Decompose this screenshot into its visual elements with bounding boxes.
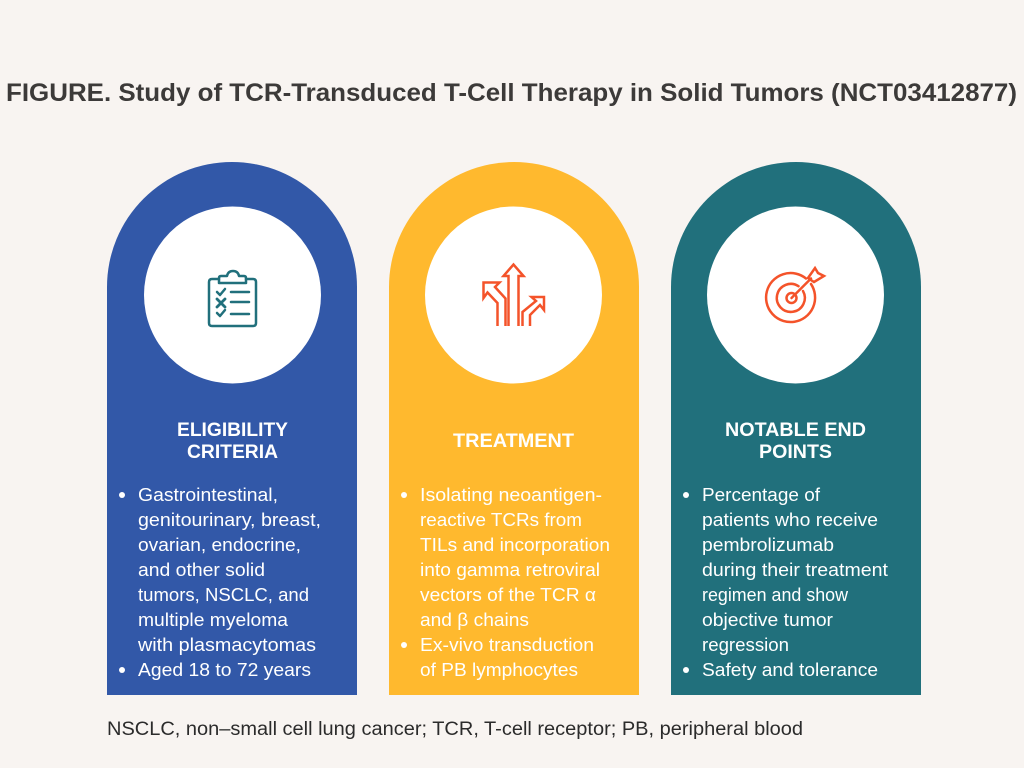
heading: notable end points: NOTABLE END — [725, 420, 866, 441]
end points list — [683, 485, 888, 680]
treatment list: TILs and incorporation — [420, 535, 610, 555]
icon: target with arrow — [766, 268, 824, 322]
icon circle: treatment — [425, 206, 602, 384]
treatment list: reactive TCRs from — [420, 510, 582, 530]
heading: treatment: TREATMENT — [453, 431, 574, 452]
eligibility criteria list: ovarian, endocrine, — [138, 535, 301, 555]
panel: notable end points — [671, 162, 921, 695]
treatment list: and β chains — [420, 610, 529, 630]
panel: treatment — [389, 162, 639, 695]
eligibility criteria list: with plasmacytomas — [137, 635, 316, 655]
icon: clipboard checklist — [209, 271, 256, 326]
icon circle: end points — [707, 206, 884, 384]
heading: notable end points: POINTS — [759, 442, 832, 463]
eligibility criteria list: multiple myeloma — [138, 610, 289, 630]
title: FIGURE. Study of TCR-Transduced T-Cell Therapy in Solid Tumors (NCT03412877) — [6, 79, 1017, 107]
end points list: Percentage of — [702, 485, 821, 505]
treatment list: into gamma retroviral — [420, 560, 600, 580]
arch background: end points — [671, 162, 921, 695]
end points list: objective tumor — [702, 610, 833, 630]
end points list: pembrolizumab — [702, 535, 834, 555]
treatment list: Ex-vivo transduction — [420, 635, 594, 655]
treatment list: of PB lymphocytes — [420, 660, 578, 680]
end points list: during their treatment — [702, 560, 888, 580]
end points list: patients who receive — [702, 510, 878, 530]
end points list: regimen and show — [702, 585, 849, 605]
eligibility criteria list: Gastrointestinal, — [138, 485, 278, 505]
end points list: regression — [702, 635, 789, 655]
panel: eligibility criteria — [107, 162, 357, 695]
eligibility criteria list: Aged 18 to 72 years — [138, 660, 311, 680]
icon: diverging arrows — [484, 264, 544, 326]
treatment list: Isolating neoantigen- — [420, 485, 602, 505]
eligibility criteria list: genitourinary, breast, — [138, 510, 321, 530]
treatment list — [401, 485, 610, 680]
heading: eligibility criteria: ELIGIBILITY — [177, 420, 288, 441]
arch background: treatment — [389, 162, 639, 695]
end points list: Safety and tolerance — [702, 660, 878, 680]
treatment list: vectors of the TCR α — [420, 585, 596, 605]
heading: eligibility criteria — [177, 420, 288, 463]
heading: notable end points — [725, 420, 866, 463]
eligibility criteria list — [119, 485, 321, 680]
eligibility criteria list: tumors, NSCLC, and — [138, 585, 309, 605]
heading: eligibility criteria: CRITERIA — [187, 442, 278, 463]
arch background: eligibility — [107, 162, 357, 695]
footnote: NSCLC, non–small cell lung cancer; TCR, T-cell receptor; PB, peripheral blood — [107, 719, 803, 740]
eligibility criteria list: and other solid — [138, 560, 265, 580]
icon circle: eligibility — [144, 206, 321, 384]
